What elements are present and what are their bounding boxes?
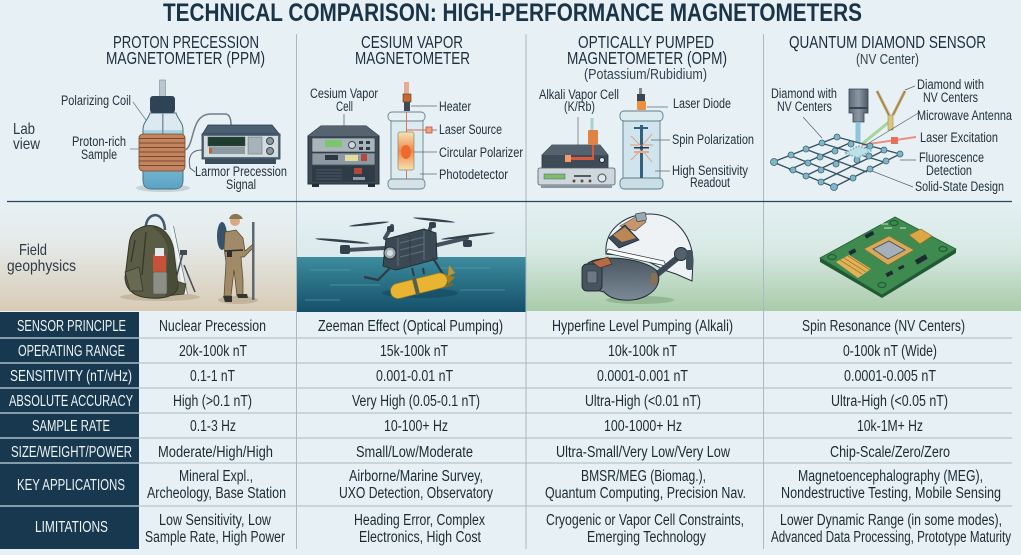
labels: proton precession: Sample: [81, 147, 117, 162]
table column: cesium vapor values: UXO Detection, Observatory: [339, 485, 493, 502]
row dividers: [0, 338, 139, 506]
table column: proton precession values: Sample Rate, High Power: [145, 529, 285, 546]
table column: cesium vapor values: 10-100+ Hz: [384, 418, 448, 435]
labels: proton precession: Polarizing Coil: [61, 93, 131, 108]
table column: quantum diamond values: Ultra-High (<0.05 nT): [831, 393, 948, 410]
table: row label column: SIZE/WEIGHT/POWER: [11, 444, 132, 461]
heading: PPM column: [106, 32, 265, 68]
table column: optically pumped values: Ultra-Small/Very Low/Very Low: [556, 444, 731, 461]
table: row label column: SENSITIVITY (nT/vHz): [10, 368, 132, 385]
panel: field geophysics backgrounds: [0, 203, 1021, 312]
table: row label column: SENSOR PRINCIPLE: [17, 318, 126, 335]
table column: cesium vapor values: [318, 318, 503, 546]
table column: proton precession values: 0.1-1 nT: [190, 368, 235, 385]
table column: proton precession values: 0.1-3 Hz: [190, 418, 236, 435]
table column: proton precession values: [145, 318, 286, 546]
row label: field geophysics: [7, 242, 76, 275]
table column: proton precession values: Nuclear Precession: [159, 318, 266, 335]
table column: quantum diamond values: Spin Resonance (NV Centers): [802, 318, 965, 335]
illustration: NV diamond circuit board: [820, 217, 956, 298]
table column: optically pumped values: Ultra-High (<0.01 nT): [585, 393, 701, 410]
illustration: quantum diamond lab setup: [770, 86, 920, 190]
table column: quantum diamond values: 10k-1M+ Hz: [857, 418, 923, 435]
row label: lab view: [13, 121, 40, 153]
illustration: optically pumped lab setup: [538, 88, 670, 189]
table column: quantum diamond values: Chip-Scale/Zero/Zero: [830, 444, 950, 461]
illustration: backpack and field surveyor: [120, 214, 258, 304]
row label: lab view: view: [13, 136, 40, 153]
table: row label column: LIMITATIONS: [35, 519, 108, 536]
band divider: [7, 200, 1012, 202]
table column: proton precession values: Low Sensitivity, Low: [159, 512, 272, 529]
labels: optically pumped: (K/Rb): [564, 99, 595, 114]
table column: optically pumped values: [545, 318, 746, 546]
heading: OPM column: [567, 32, 727, 83]
labels: proton precession: Larmor Precession: [195, 164, 287, 179]
labels: cesium vapor: Laser Source: [439, 122, 502, 137]
labels: optically pumped: [539, 87, 754, 190]
illustration: proton precession lab setup: [130, 80, 280, 192]
table: row label column: [0, 312, 139, 549]
labels: cesium vapor: Cesium Vapor: [310, 86, 378, 101]
table: row grid lines: [139, 338, 1012, 506]
labels: optically pumped: Spin Polarization: [672, 132, 754, 147]
table: row label column: SAMPLE RATE: [32, 418, 110, 435]
heading: cesium column: MAGNETOMETER: [355, 48, 470, 68]
labels: quantum diamond: Laser Excitation: [920, 130, 998, 145]
labels: optically pumped: Laser Diode: [673, 96, 731, 111]
heading: OPM column: OPTICALLY PUMPED: [578, 32, 714, 52]
row label: field geophysics: geophysics: [7, 258, 76, 275]
table column: cesium vapor values: Very High (0.05-0.1 nT): [352, 393, 480, 410]
table column: cesium vapor values: Airborne/Marine Survey,: [349, 468, 483, 485]
table column: proton precession values: Archeology, Base Station: [147, 485, 286, 502]
table column: proton precession values: 20k-100k nT: [179, 343, 247, 360]
table column: optically pumped values: 10k-100k nT: [608, 343, 677, 360]
table column: quantum diamond values: 0-100k nT (Wide): [843, 343, 937, 360]
table: row label column: KEY APPLICATIONS: [17, 477, 125, 494]
heading: quantum diamond column: (NV Center): [856, 51, 919, 68]
labels: quantum diamond: NV Centers: [923, 90, 978, 105]
labels: cesium vapor: [310, 86, 523, 182]
table column: proton precession values: High (>0.1 nT): [173, 393, 252, 410]
heading: OPM column: MAGNETOMETER (OPM): [567, 48, 727, 68]
illustration: OPM sensor helmet: [582, 212, 693, 304]
table column: optically pumped values: Cryogenic or Vapor Cell Constraints,: [546, 512, 744, 529]
labels: quantum diamond: Fluorescence: [919, 150, 984, 165]
table column: optically pumped values: Quantum Computing, Precision Nav.: [545, 485, 746, 502]
heading: quantum diamond column: [789, 32, 986, 68]
labels: cesium vapor: Photodetector: [439, 167, 508, 182]
labels: quantum diamond: Diamond with: [917, 77, 984, 92]
table column: quantum diamond values: [771, 318, 1011, 546]
labels: quantum diamond: NV Centers: [777, 99, 832, 114]
illustration: cesium vapor lab setup: [308, 82, 437, 189]
table column: optically pumped values: 0.0001-0.001 nT: [597, 368, 688, 385]
heading: PPM column: MAGNETOMETER (PPM): [106, 48, 265, 68]
heading: OPM column: (Potassium/Rubidium): [584, 66, 707, 83]
table: row label column: ABSOLUTE ACCURACY: [9, 393, 133, 410]
table column: optically pumped values: Hyperfine Level Pumping (Alkali): [552, 318, 733, 335]
row label: lab view: Lab: [13, 121, 35, 138]
labels: proton precession: Proton-rich: [72, 134, 126, 149]
table column: proton precession values: Mineral Expl.,: [179, 468, 253, 485]
labels: proton precession: Signal: [226, 177, 256, 192]
labels: cesium vapor: Heater: [439, 99, 471, 114]
labels: optically pumped: High Sensitivity: [672, 163, 748, 178]
column dividers: [296, 34, 764, 549]
table column: cesium vapor values: Small/Low/Moderate: [356, 444, 473, 461]
labels: quantum diamond: Diamond with: [771, 86, 837, 101]
labels: cesium vapor: Circular Polarizer: [439, 145, 523, 160]
labels: optically pumped: Alkali Vapor Cell: [539, 87, 619, 102]
illustration: drone with towed sensor: [315, 217, 495, 301]
labels: quantum diamond: [771, 77, 1012, 194]
table column: cesium vapor values: 0.001-0.01 nT: [376, 368, 453, 385]
table column: cesium vapor values: Zeeman Effect (Optical Pumping): [318, 318, 503, 335]
table column: proton precession values: Moderate/High/High: [158, 444, 273, 461]
labels: cesium vapor: Cell: [336, 99, 353, 114]
table column: optically pumped values: BMSR/MEG (Biomag.),: [581, 468, 706, 485]
table column: quantum diamond values: 0.0001-0.005 nT: [844, 368, 936, 385]
table column: optically pumped values: Emerging Technology: [587, 529, 706, 546]
table: row label column: OPERATING RANGE: [18, 343, 125, 360]
table column: optically pumped values: 100-1000+ Hz: [604, 418, 682, 435]
table column: cesium vapor values: 15k-100k nT: [380, 343, 448, 360]
table column: cesium vapor values: Heading Error, Complex: [354, 512, 485, 529]
labels: optically pumped: Readout: [690, 175, 730, 190]
table column: cesium vapor values: Electronics, High Cost: [359, 529, 482, 546]
heading: PPM column: PROTON PRECESSION: [113, 32, 259, 52]
heading: cesium column: [355, 32, 470, 68]
row label: field geophysics: Field: [19, 242, 47, 259]
labels: proton precession: [61, 93, 287, 192]
labels: quantum diamond: Detection: [926, 163, 972, 178]
heading: cesium column: CESIUM VAPOR: [361, 32, 463, 52]
